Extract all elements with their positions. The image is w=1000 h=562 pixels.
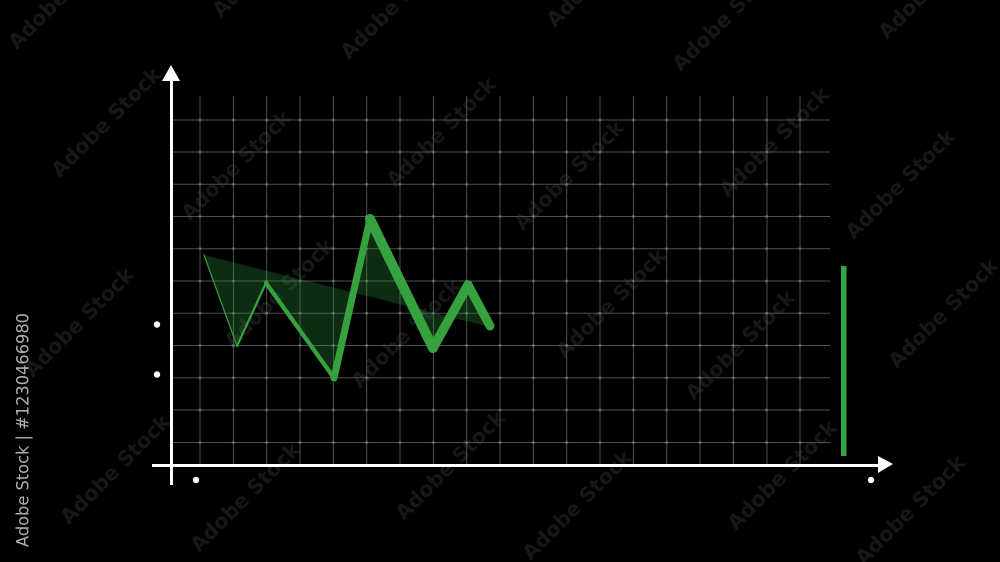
- watermark pattern: Adobe Stock: [46, 61, 167, 182]
- y axis with arrow: [162, 65, 180, 485]
- chart grid: [172, 96, 830, 465]
- stock id caption: Adobe Stock | #1230466980: [14, 313, 34, 547]
- axis dots: [154, 321, 874, 483]
- watermark pattern: Adobe Stock: [517, 444, 638, 562]
- watermark pattern: Adobe Stock: [176, 104, 297, 225]
- vertical green bar: [841, 266, 846, 456]
- watermark pattern: Adobe Stock: [55, 408, 176, 529]
- watermark pattern: Adobe Stock: [390, 404, 511, 525]
- watermark pattern: Adobe Stock: [883, 252, 1000, 373]
- watermark pattern: Adobe Stock: [19, 261, 140, 382]
- watermark pattern: Adobe Stock: [509, 114, 630, 235]
- area fill under line: [204, 217, 490, 380]
- green line chart with growing stroke: [204, 219, 490, 378]
- watermark pattern: Adobe Stock: [680, 284, 801, 405]
- watermark pattern: Adobe Stock: [714, 81, 835, 202]
- watermark pattern: Adobe Stock: [346, 272, 467, 393]
- x axis with arrow: [152, 456, 893, 473]
- watermark pattern: Adobe Stock: [381, 71, 502, 192]
- watermark pattern: Adobe Stock: [551, 242, 672, 363]
- watermark pattern: Adobe Stock: [219, 232, 340, 353]
- watermark pattern: Adobe Stock: [840, 123, 961, 244]
- watermark pattern: Adobe Stock: [722, 414, 843, 535]
- watermark pattern: Adobe Stock: [185, 436, 306, 557]
